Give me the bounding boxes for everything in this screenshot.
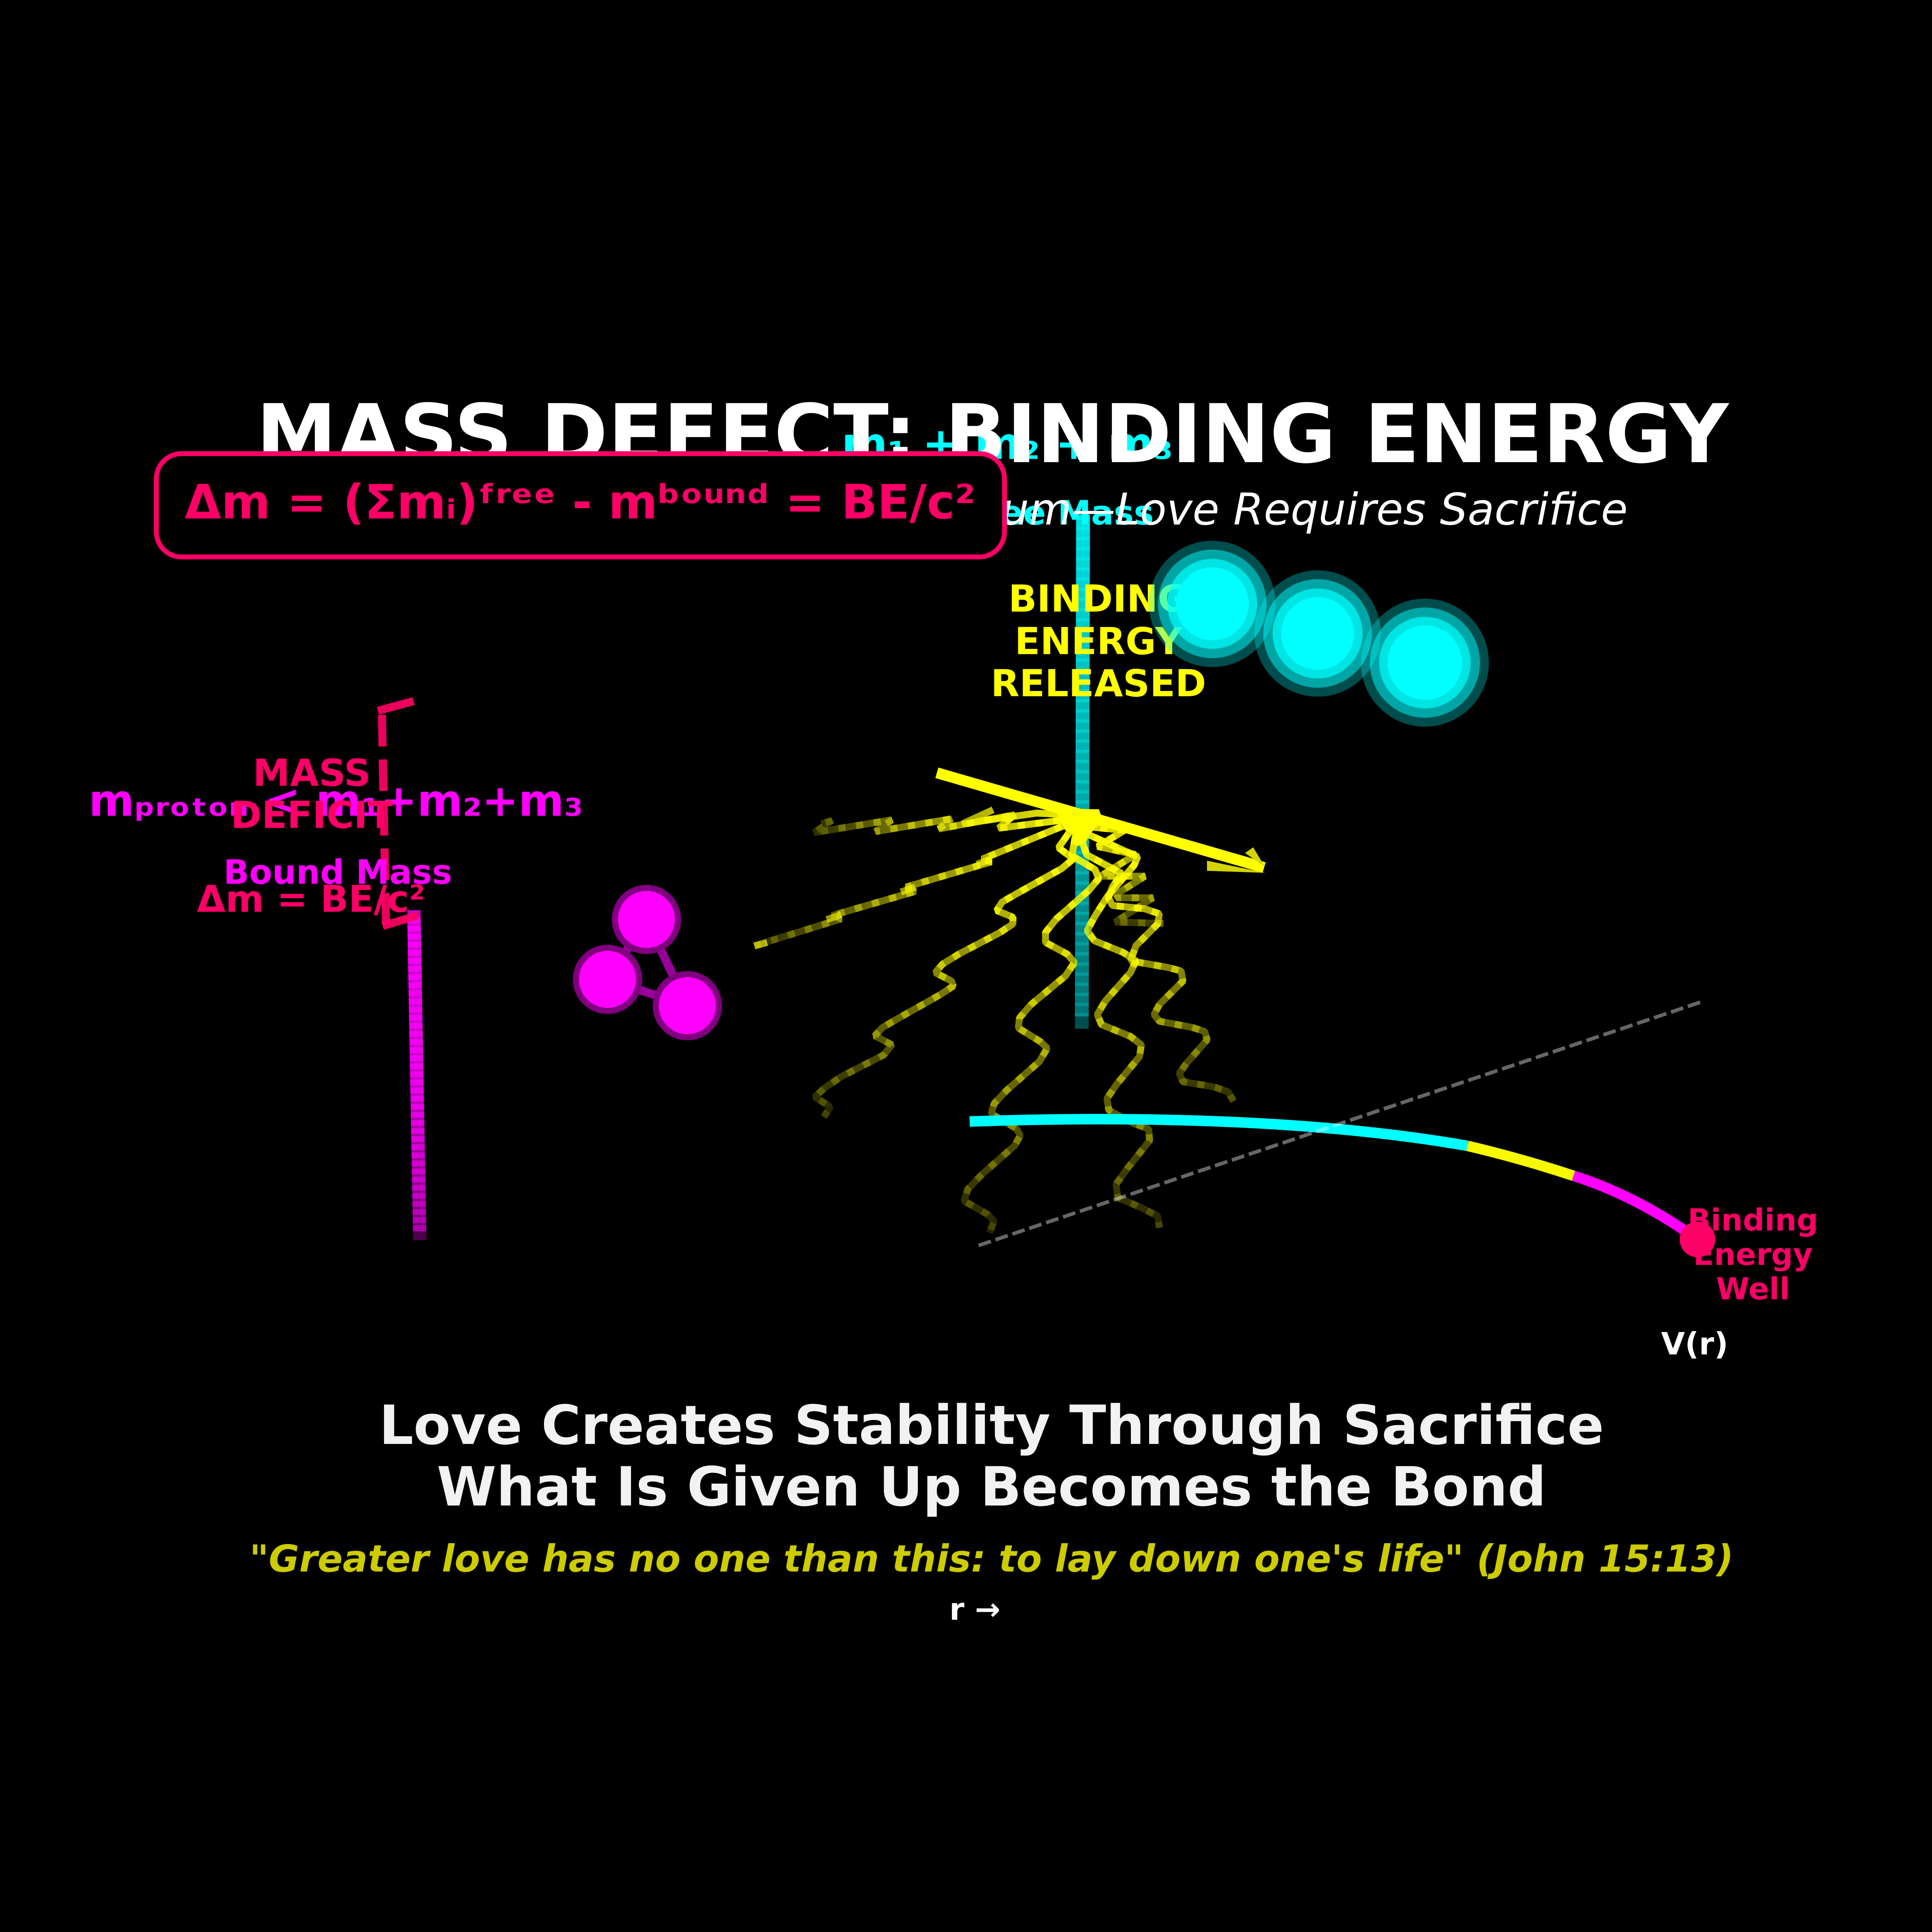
label: mass deficit: DEFICIT: [231, 793, 393, 837]
axis label V(r): V(r): [1661, 1326, 1728, 1362]
quark c: [656, 974, 719, 1037]
mass deficit bracket: [378, 701, 418, 927]
potential energy curve: [970, 1119, 1697, 1239]
bolt: left straight: [755, 820, 1078, 946]
formula box: [156, 454, 1004, 557]
links: [608, 919, 687, 1006]
label: delta m: Δm = BE/c²: [197, 878, 425, 921]
yellow segment: [1467, 1146, 1574, 1176]
quark b: [576, 948, 639, 1011]
label: m1 + m2 + m3: m₁ + m₂ + m₃: [842, 418, 1173, 469]
quark 3: [1361, 599, 1489, 727]
conclusion heading: Love Creates Stability Through Sacrifice: [379, 1394, 1604, 1457]
dashed zero line: [979, 1001, 1704, 1245]
bound mass bar: [414, 910, 420, 1240]
bolt: upper left: [814, 810, 1078, 833]
label: bound mass: Bound Mass: [224, 853, 452, 892]
quark 1: [1149, 541, 1275, 667]
magenta segment: [1574, 1176, 1697, 1239]
equation: m proton less than sum: mₚᵣₒₜₒₙ < m₁+m₂+m₃: [89, 776, 583, 826]
subtitle: Quantum—Love Requires Sacrifice: [868, 484, 1628, 535]
label: binding energy well: Energy: [1693, 1237, 1813, 1272]
label: binding energy released: ENERGY: [1015, 620, 1183, 663]
label: binding energy released: [991, 577, 1206, 705]
quark a: [615, 888, 678, 951]
bolt: lower right: [1078, 830, 1160, 1228]
bound quarks: three magenta circles with links: [576, 888, 719, 1037]
bolt: lower middle: [964, 820, 1099, 1233]
quark 2: [1254, 570, 1381, 697]
binding energy arrow: [937, 773, 1265, 873]
label: binding energy released: RELEASED: [991, 662, 1206, 705]
label: binding energy well: [1688, 1202, 1818, 1307]
axis label r: r →: [949, 1591, 1000, 1627]
bright patches on straight bolt: [755, 859, 991, 946]
center burst: [1057, 809, 1102, 847]
cyan segment: [970, 1119, 1467, 1146]
lightning bolts: [755, 809, 1234, 1233]
well marker dot: [1680, 1222, 1715, 1257]
label: binding energy released: BINDING: [1009, 577, 1188, 621]
bolt: short zigzag near center: [1083, 826, 1164, 923]
free quarks: three cyan glowing circles: [1149, 541, 1489, 727]
label: mass deficit: [231, 751, 393, 837]
label: binding energy well: Binding: [1688, 1202, 1818, 1238]
formula: Δm = (Σmᵢ)ᶠʳᵉᵉ - mᵇᵒᵘⁿᵈ = BE/c²: [185, 475, 975, 530]
conclusion heading: What Is Given Up Becomes the Bond: [437, 1456, 1546, 1518]
label: mass deficit: MASS: [253, 751, 371, 795]
label: binding energy well: Well: [1716, 1271, 1790, 1307]
label: free mass: Free Mass: [963, 493, 1154, 533]
bolt: far right: [1078, 830, 1234, 1101]
bolt: lower left: [815, 820, 1078, 1117]
conclusion heading: [379, 1394, 1604, 1518]
title: MASS DEFECT: BINDING ENERGY: [256, 387, 1729, 482]
scripture quote: "Greater love has no one than this: to lay down one's life" (John 15:13): [249, 1537, 1734, 1580]
free mass bar: [1082, 514, 1083, 1029]
